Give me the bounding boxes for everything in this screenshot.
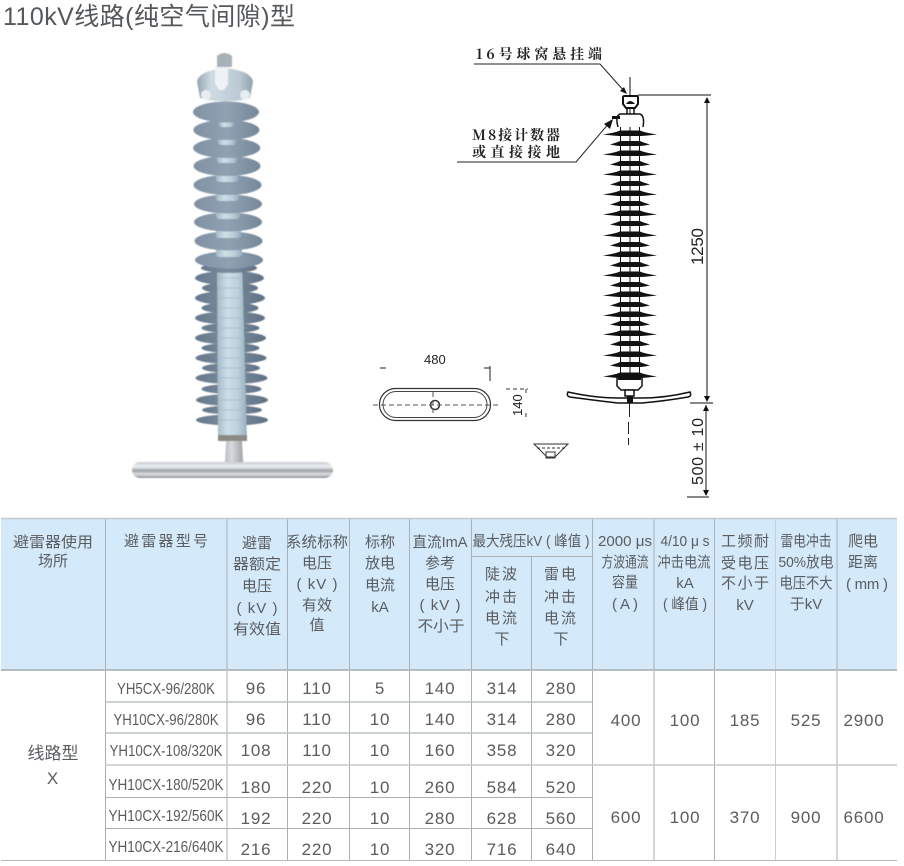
- header: 直流1mA参考电压: 电压: [425, 576, 455, 593]
- value: 500 ± 10: [690, 418, 707, 485]
- header: 工频耐受电压: [721, 533, 769, 614]
- photo: top terminal: [217, 53, 232, 67]
- bracket inner line: [537, 447, 565, 449]
- row 6: 216: [241, 840, 271, 859]
- header: 雷电冲击电流下: 雷电: [544, 566, 578, 583]
- header: 系统标称电压: [286, 534, 348, 634]
- row 5: 560: [546, 809, 576, 828]
- dim 140: 140: [510, 394, 525, 416]
- row 2: [114, 710, 576, 729]
- header: 爬电距离: ( mm ): [846, 576, 888, 593]
- callout text: 16号球窝悬挂端: [476, 44, 602, 64]
- extension lines: [687, 403, 713, 497]
- dim 140 arrows: [506, 389, 528, 417]
- center mark: [430, 400, 440, 410]
- cell: 线路型 X: X: [47, 769, 59, 788]
- row 3: YH10CX-108/320K: [110, 743, 223, 760]
- row 3: 160: [425, 741, 455, 760]
- row 4: 260: [425, 778, 455, 797]
- row 1: 140: [425, 679, 455, 698]
- row 4: 584: [487, 778, 517, 797]
- row 2: 96: [246, 710, 266, 729]
- arrow bottom: [703, 490, 709, 496]
- header: 工频耐受电压: 不小于: [721, 575, 769, 592]
- merged cells: group 2: 6600: [843, 808, 885, 827]
- value: 1250: [688, 228, 707, 265]
- table grid: [1, 518, 897, 860]
- center line: [629, 77, 631, 378]
- row 6: 220: [302, 840, 332, 859]
- header: 冲击电流: kA: [676, 575, 694, 592]
- row 5: 628: [487, 809, 517, 828]
- cell: 线路型 X: 线路型: [28, 744, 78, 763]
- merged cells: group 2: 100: [670, 808, 700, 827]
- photo: lower sheds: [195, 271, 268, 426]
- socket detail: [626, 101, 635, 104]
- header: 雷电冲击电流下: 下: [553, 631, 569, 648]
- row 5: 192: [241, 809, 271, 828]
- nut top shading: [618, 377, 641, 380]
- row 3: [110, 741, 576, 760]
- header: 冲击电流: 冲击电流: [658, 554, 710, 571]
- row 4: 520: [546, 778, 576, 797]
- header: 雷电冲击放电电压: [778, 533, 834, 613]
- row 3: 108: [241, 741, 271, 760]
- dimension: 1250: [638, 95, 711, 402]
- photo: core column: [217, 262, 247, 441]
- row 1: 280: [546, 679, 576, 698]
- header: 直流1mA参考电压: 不小于: [418, 618, 464, 635]
- header: 方波通流容量: 容量: [612, 574, 638, 591]
- row 5: 220: [302, 809, 332, 828]
- header: 雷电冲击电流下: 冲击: [544, 589, 578, 606]
- bracket detail: [534, 444, 568, 458]
- merged cells: group 2: 370: [730, 808, 760, 827]
- header: 额定电压: 器额定: [233, 556, 281, 573]
- row 1: 5: [375, 679, 385, 698]
- header: 雷电冲击放电电压: 雷电冲击: [780, 533, 832, 550]
- merged cells: group 1: 2900: [843, 711, 885, 730]
- header: 避雷器使用场所: 场所: [38, 553, 68, 570]
- header: 额定电压: 避雷: [242, 535, 272, 552]
- row 4: 220: [302, 778, 332, 797]
- arrow bottom: [704, 396, 710, 402]
- row 4: 180: [241, 778, 271, 797]
- header: 标称放电电流: 标称: [365, 534, 395, 551]
- header: 陡波冲击电流下: 陡波: [485, 566, 519, 583]
- merged cells: group 1: 185: [730, 711, 760, 730]
- arrow head: [620, 87, 627, 94]
- header: 避雷器使用场所: [13, 534, 93, 570]
- leader line: [457, 122, 610, 162]
- arrow top: [704, 97, 710, 103]
- inner ring: [383, 392, 487, 418]
- header: 雷电冲击电流下: 电流: [544, 610, 578, 627]
- plan view: grading ring: [373, 352, 528, 420]
- header: 避雷器使用场所: 避雷器使用: [13, 534, 93, 551]
- row 2: 140: [425, 710, 455, 729]
- arrow top: [703, 405, 709, 411]
- header: 爬电距离: [846, 533, 888, 593]
- leader line: [474, 64, 625, 92]
- merged cells: group 1: 525: [791, 711, 821, 730]
- table header background: [1, 518, 897, 670]
- header: 雷电冲击放电电压: 50%放电: [778, 554, 834, 571]
- header: 陡波冲击电流下: 下: [494, 631, 510, 648]
- row 4: 10: [370, 778, 390, 797]
- sheds: [603, 130, 657, 378]
- ball socket: [623, 96, 638, 108]
- header: 冲击电流: 4/10 μ s: [660, 533, 710, 550]
- header: 工频耐受电压: 工频耐: [721, 533, 769, 550]
- header: 系统标称电压: 电压: [302, 555, 332, 572]
- outer ring: [380, 388, 490, 420]
- photo: surge arrester: [132, 53, 333, 478]
- row 6: 320: [425, 840, 455, 859]
- header: 陡波冲击电流下: [485, 566, 519, 648]
- row 1: 96: [246, 679, 266, 698]
- header: 额定电压: ( kV ): [236, 600, 278, 617]
- row 1: 110: [302, 679, 332, 698]
- row 5: 280: [425, 809, 455, 828]
- row 3: 10: [370, 741, 390, 760]
- photo: white clip: [215, 67, 228, 90]
- callout: 16号球窝悬挂端: [474, 44, 627, 94]
- header: 系统标称电压: ( kV ): [296, 576, 338, 593]
- row 2: 314: [487, 710, 517, 729]
- row 3: 358: [487, 741, 517, 760]
- arrow head: [604, 119, 613, 129]
- header: 标称放电电流: 放电: [365, 555, 395, 572]
- row 6: 640: [546, 840, 576, 859]
- photo: grading ring: [132, 462, 333, 478]
- header: 冲击电流: ( 峰值 ): [663, 596, 707, 613]
- center axes: [373, 392, 500, 416]
- ring center: [627, 396, 633, 403]
- header: 最大残压: 最大残压kV ( 峰值 ): [472, 533, 590, 550]
- row 5: [108, 808, 576, 828]
- grading ring: [567, 392, 691, 403]
- row 2: 10: [370, 710, 390, 729]
- header: 工频耐受电压: kV: [736, 597, 754, 614]
- row 1: [117, 679, 576, 698]
- header: 直流1mA参考电压: 参考: [425, 555, 455, 572]
- merged cells: group 2: 600: [611, 808, 641, 827]
- callout text line 1: M8接计数器: [472, 125, 560, 145]
- header: 标称放电电流: [365, 534, 395, 616]
- dimension: 500±10: [687, 403, 713, 497]
- header: 直流1mA参考电压: [412, 534, 468, 635]
- header: 额定电压: 电压: [242, 578, 272, 595]
- bracket outline: [534, 444, 568, 457]
- photo: glass disc: [197, 68, 253, 102]
- header: 爬电距离: 爬电: [848, 533, 878, 550]
- merged cells: group 2: 900: [791, 808, 821, 827]
- header: 方波通流容量: 方波通流: [602, 554, 648, 571]
- header: 标称放电电流: kA: [371, 599, 389, 616]
- header: 系统标称电压: 值: [309, 617, 325, 634]
- row 2: 280: [546, 710, 576, 729]
- title: 110kV线路(纯空气间隙)型: [3, 3, 295, 31]
- row 5: YH10CX-192/560K: [108, 808, 224, 825]
- header: 雷电冲击放电电压: 于kV: [790, 596, 822, 613]
- line drawing: elevation: [567, 77, 691, 445]
- photo: bottom stem: [222, 441, 246, 467]
- dim 480: 480: [424, 352, 446, 367]
- callout text line 2: 或直接接地: [472, 142, 560, 162]
- header: 方波通流容量: ( A ): [612, 596, 638, 613]
- merged cells: group 2: [611, 808, 885, 827]
- header: 方波通流容量: [598, 533, 652, 613]
- row 1: 314: [487, 679, 517, 698]
- header: 系统标称电压: 系统标称: [286, 534, 348, 551]
- lower stud: [625, 390, 634, 396]
- extension line: [638, 95, 711, 400]
- row 2: 110: [302, 710, 332, 729]
- merged cells: group 1: [611, 711, 885, 730]
- core outline: [620, 125, 640, 376]
- header: 系统标称电压: 有效: [302, 597, 332, 614]
- header: 方波通流容量: 2000 μs: [598, 533, 652, 550]
- header: 爬电距离: 距离: [848, 554, 878, 571]
- row 6: [108, 839, 576, 859]
- row 5: 10: [370, 809, 390, 828]
- header: 额定电压: 有效值: [233, 621, 281, 638]
- header: 工频耐受电压: 受电压: [721, 555, 769, 572]
- bottom nut: [617, 377, 642, 390]
- header: 避雷器型号: 避雷器型号: [124, 533, 208, 550]
- photo: upper sheds: [193, 102, 263, 273]
- callout: M8接计数器: [457, 119, 613, 162]
- photo: side knobs: [201, 90, 250, 100]
- row 3: 320: [546, 741, 576, 760]
- header: 额定电压: [233, 535, 281, 638]
- header: 雷电冲击放电电压: 电压不大: [780, 575, 832, 592]
- top flange: [617, 114, 644, 127]
- row 6: 716: [487, 840, 517, 859]
- bracket foot: [546, 452, 555, 458]
- header: 雷电冲击电流下: [544, 566, 578, 648]
- dim 480 arrows: [380, 366, 490, 381]
- header: 直流1mA参考电压: ( kV ): [420, 597, 460, 614]
- row 3: 110: [302, 741, 332, 760]
- row 2: YH10CX-96/280K: [114, 712, 219, 729]
- merged cells: group 1: 100: [670, 711, 700, 730]
- row 4: [108, 777, 576, 797]
- header: 陡波冲击电流下: 电流: [485, 610, 519, 627]
- row 6: 10: [370, 840, 390, 859]
- row 6: YH10CX-216/640K: [108, 839, 224, 856]
- table: [1, 518, 897, 860]
- header: 标称放电电流: 电流: [365, 577, 395, 594]
- merged cells: group 1: 400: [611, 711, 641, 730]
- photo: bottom metal band: [218, 435, 247, 441]
- header: 陡波冲击电流下: 冲击: [485, 589, 519, 606]
- cell: 线路型 X: [28, 744, 78, 788]
- socket neck: [627, 108, 634, 114]
- row 1: YH5CX-96/280K: [117, 681, 215, 698]
- row 4: YH10CX-180/520K: [108, 777, 224, 794]
- center dash line: [628, 403, 630, 445]
- header: 直流1mA参考电压: 直流ImA: [412, 534, 468, 551]
- m8 stud: [612, 116, 620, 119]
- header: 冲击电流: [658, 533, 710, 613]
